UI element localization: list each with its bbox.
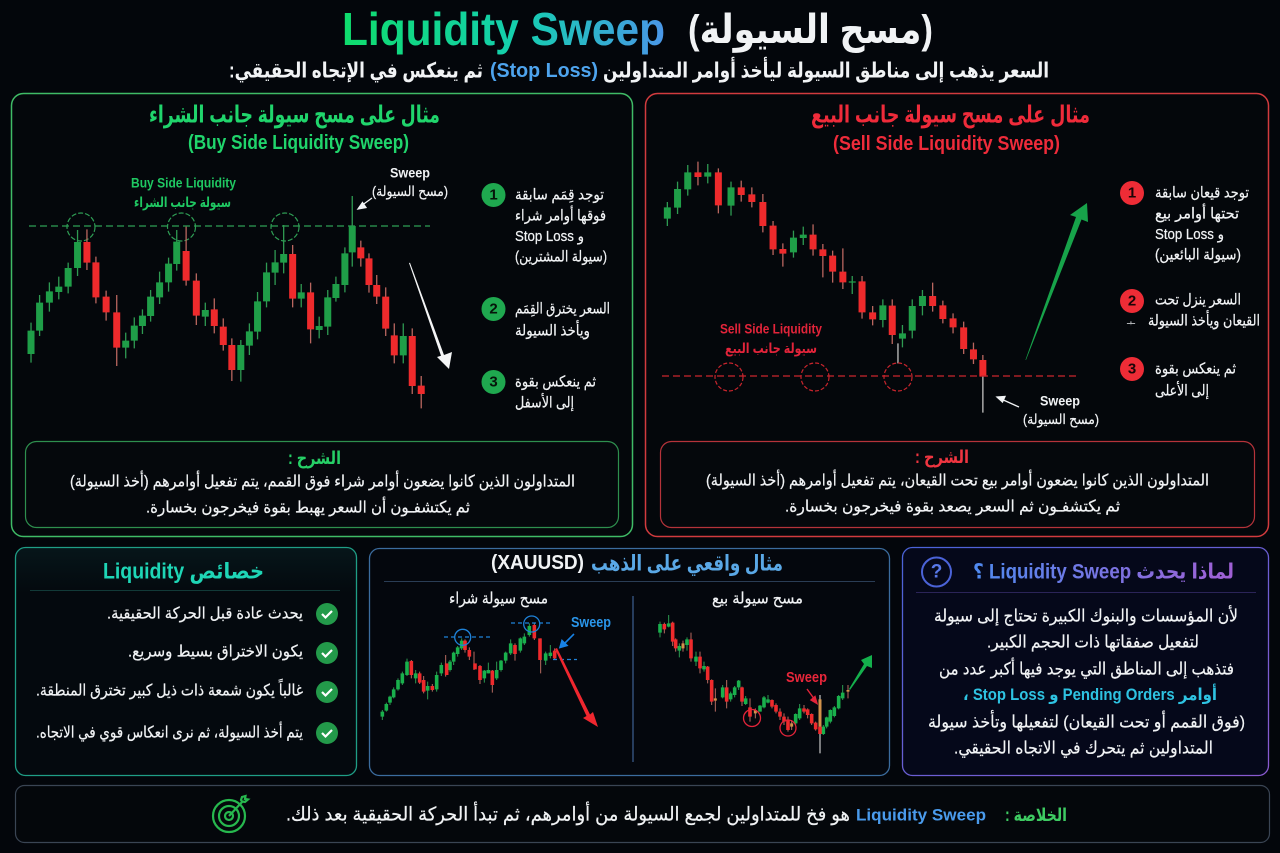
conclusion text: Liquidity Sweep: [856, 806, 986, 824]
step 1: [482, 183, 607, 266]
explanation box: sell side: [660, 442, 1254, 528]
step 2: [1120, 289, 1260, 330]
icon: question mark: [922, 558, 951, 586]
item 4: يتم أخذ السيولة، ثم نرى انعكاس قوي في الاتجاه.: [36, 722, 303, 742]
label: sweep: (مسح السيولة): [1023, 411, 1099, 428]
step 1: توجد قِمَم سابقة: [515, 186, 604, 204]
candlestick chart: buy side: [31, 196, 421, 408]
panel: buy side liquidity sweep: [12, 94, 632, 536]
heading: gold example: [491, 550, 783, 576]
item 3: [36, 678, 338, 703]
step 1: توجد قيعان سابقة: [1155, 184, 1249, 202]
conclusion text: [286, 802, 1067, 826]
arrow: green up: [1026, 203, 1088, 360]
label: buy side liquidity: Buy Side Liquidity: [131, 176, 236, 190]
step 1: 1: [1128, 184, 1136, 202]
explanation box: sell side: ثم يكتشفـون ثم السعر يصعد بقوة فيخرجون بخسارة.: [785, 498, 1120, 516]
subtitle: (Stop Loss): [490, 60, 598, 82]
conclusion text: الخلاصة :: [1005, 805, 1067, 825]
heading: why: لماذا يحدث Liquidity Sweep ؟: [973, 560, 1234, 584]
step 2: ويأخذ السيولة: [515, 320, 590, 340]
candlestick chart: sell side: [667, 162, 983, 413]
step 2: القيعان ويأخذ السيولة: [1148, 310, 1260, 330]
body text: why: [928, 606, 1245, 758]
label: buy side liquidity: [131, 176, 236, 211]
label: buy side liquidity: سيولة جانب الشراء: [134, 194, 231, 211]
sub-heading: sell sweep: مسح سيولة بيع: [712, 590, 803, 608]
icon: target: [213, 796, 248, 832]
explanation box: sell side: الشرح :: [915, 447, 969, 468]
arrow: red pointer: [807, 689, 817, 704]
label: sweep: Sweep: [390, 166, 430, 180]
step 3: 3: [489, 374, 498, 390]
subtitle: [229, 56, 1049, 82]
title: (مسح السيولة): [688, 8, 933, 53]
label: sweep: (مسح السيولة): [372, 183, 448, 200]
heading: sell side: (Sell Side Liquidity Sweep): [833, 133, 1060, 155]
step 3: ثم ينعكس بقوة: [515, 374, 596, 390]
panel: real example on gold: [370, 548, 890, 776]
explanation box: sell side: المتداولون الذين كانوا يضعون أوامر بيع تحت القيعان، يتم تفعيل أوامرهم (أخذ السيولة): [706, 470, 1209, 490]
body text: why: (فوق القمم أو تحت القيعان) لتفعيلها وتأخذ سيولة: [928, 710, 1245, 732]
subtitle: ثم ينعكس في الإتجاه الحقيقي:: [229, 60, 483, 82]
body text: why: لأن المؤسسات والبنوك الكبيرة تحتاج إلى سيولة: [934, 606, 1238, 626]
label: sweep: [372, 166, 448, 200]
body text: why: أوامر Pending Orders و Stop Loss ،: [963, 684, 1217, 705]
arrow: sweep pointer: [997, 396, 1019, 407]
arrow: white down: [409, 263, 452, 369]
arrow: red down: [555, 648, 598, 727]
label: sweep blue: Sweep: [571, 615, 611, 631]
item 1: يحدث عادة قبل الحركة الحقيقية.: [107, 606, 303, 624]
heading: gold example: مثال واقعي على الذهب: [591, 550, 783, 576]
step 1: و Stop Loss: [1155, 227, 1224, 243]
label: sweep red: Sweep: [786, 670, 827, 686]
title: [342, 3, 933, 55]
subtitle: السعر يذهب إلى مناطق السيولة ليأخذ أوامر المتداولين: [603, 56, 1049, 82]
arrow: green up: [849, 655, 872, 690]
markers: gold buy sweep: [444, 616, 577, 660]
item 2: [128, 642, 338, 664]
item 2: يكون الاختراق بسيط وسريع.: [128, 644, 303, 662]
label: sweep: [1023, 394, 1099, 428]
panel: sell side liquidity sweep: [646, 94, 1268, 536]
step 1: 1: [489, 186, 498, 204]
heading: characteristics: خصائص Liquidity: [103, 558, 264, 584]
label: sell side liquidity: Sell Side Liquidity: [720, 322, 822, 336]
title: Liquidity Sweep: [342, 3, 665, 55]
label: sell side liquidity: سيولة جانب البيع: [725, 340, 817, 357]
step 3: [482, 370, 596, 412]
icon: question mark: ?: [931, 562, 942, 582]
body text: why: المتداولين ثم يتحرك في الاتجاه الحقيقي.: [954, 738, 1213, 758]
conclusion text: هو فخ للمتداولين لجمع السيولة من أوامرهم، ثم تبدأ الحركة الحقيقية بعد ذلك.: [286, 802, 850, 826]
step 2: [482, 297, 610, 340]
sell side liquidity line and circles: [662, 363, 1080, 391]
step 2: ـبـ: [1126, 316, 1135, 326]
heading: buy side: (Buy Side Liquidity Sweep): [188, 132, 409, 154]
step 1: (سيولة المشترين): [515, 248, 607, 266]
heading: buy side: مثال على مسح سيولة جانب الشراء: [149, 102, 440, 128]
sub-heading: buy sweep: مسح سيولة شراء: [449, 590, 548, 608]
markers: gold sell circles: [744, 710, 796, 736]
heading: buy side: [149, 102, 440, 154]
step 2: السعر يخترق القِمَم: [515, 300, 610, 318]
explanation box: buy side: المتداولون الذين كانوا يضعون أوامر شراء فوق القمم، يتم تفعيل أوامرهم (أخذ السيولة): [70, 470, 575, 492]
step 1: و Stop Loss: [515, 229, 584, 245]
step 2: 2: [1128, 292, 1136, 310]
step 2: 2: [489, 300, 498, 318]
step 1: فوقها أوامر شراء: [515, 206, 606, 224]
explanation box: buy side: [26, 442, 618, 528]
explanation box: buy side: الشرح :: [288, 448, 341, 469]
explanation box: buy side: ثم يكتشفـون أن السعر يهبط بقوة فيخرجون بخسارة.: [146, 496, 470, 518]
step 2: السعر ينزل تحت: [1155, 292, 1241, 308]
step 1: [1120, 181, 1249, 264]
label: sell side liquidity: [720, 322, 822, 357]
item 3: غالباً يكون شمعة ذات ذيل كبير تخترق المنطقة.: [36, 678, 303, 700]
body text: why: فتذهب إلى المناطق التي يوجد فيها أكبر عدد من: [939, 658, 1234, 680]
step 3: 3: [1128, 360, 1136, 378]
step 3: إلى الأسفل: [515, 392, 574, 412]
label: sweep: Sweep: [1040, 394, 1080, 408]
buy side liquidity line and circles: [29, 213, 430, 241]
panel: conclusion: [16, 786, 1270, 842]
step 3: إلى الأعلى: [1155, 380, 1209, 400]
panel: why liquidity sweep happens: [902, 548, 1268, 776]
chart: gold buy sweep: [382, 616, 577, 720]
step 3: [1120, 357, 1236, 400]
heading: sell side: [811, 102, 1090, 155]
steps: buy side: [482, 183, 610, 412]
step 1: تحتها أوامر بيع: [1155, 204, 1239, 222]
step 1: (سيولة البائعين): [1155, 246, 1241, 264]
step 3: ثم ينعكس بقوة: [1155, 360, 1236, 378]
chart: gold sell sweep: [660, 615, 848, 753]
heading: gold example: (XAUUSD): [491, 552, 584, 574]
steps: sell side: [1120, 181, 1260, 400]
heading: sell side: مثال على مسح سيولة جانب البيع: [811, 102, 1090, 128]
body text: why: لتفعيل صفقاتها ذات الحجم الكبير.: [987, 632, 1199, 652]
panel: liquidity characteristics: [16, 548, 356, 776]
arrow: sweep pointer: [358, 198, 372, 209]
arrow: blue pointer: [560, 634, 574, 648]
